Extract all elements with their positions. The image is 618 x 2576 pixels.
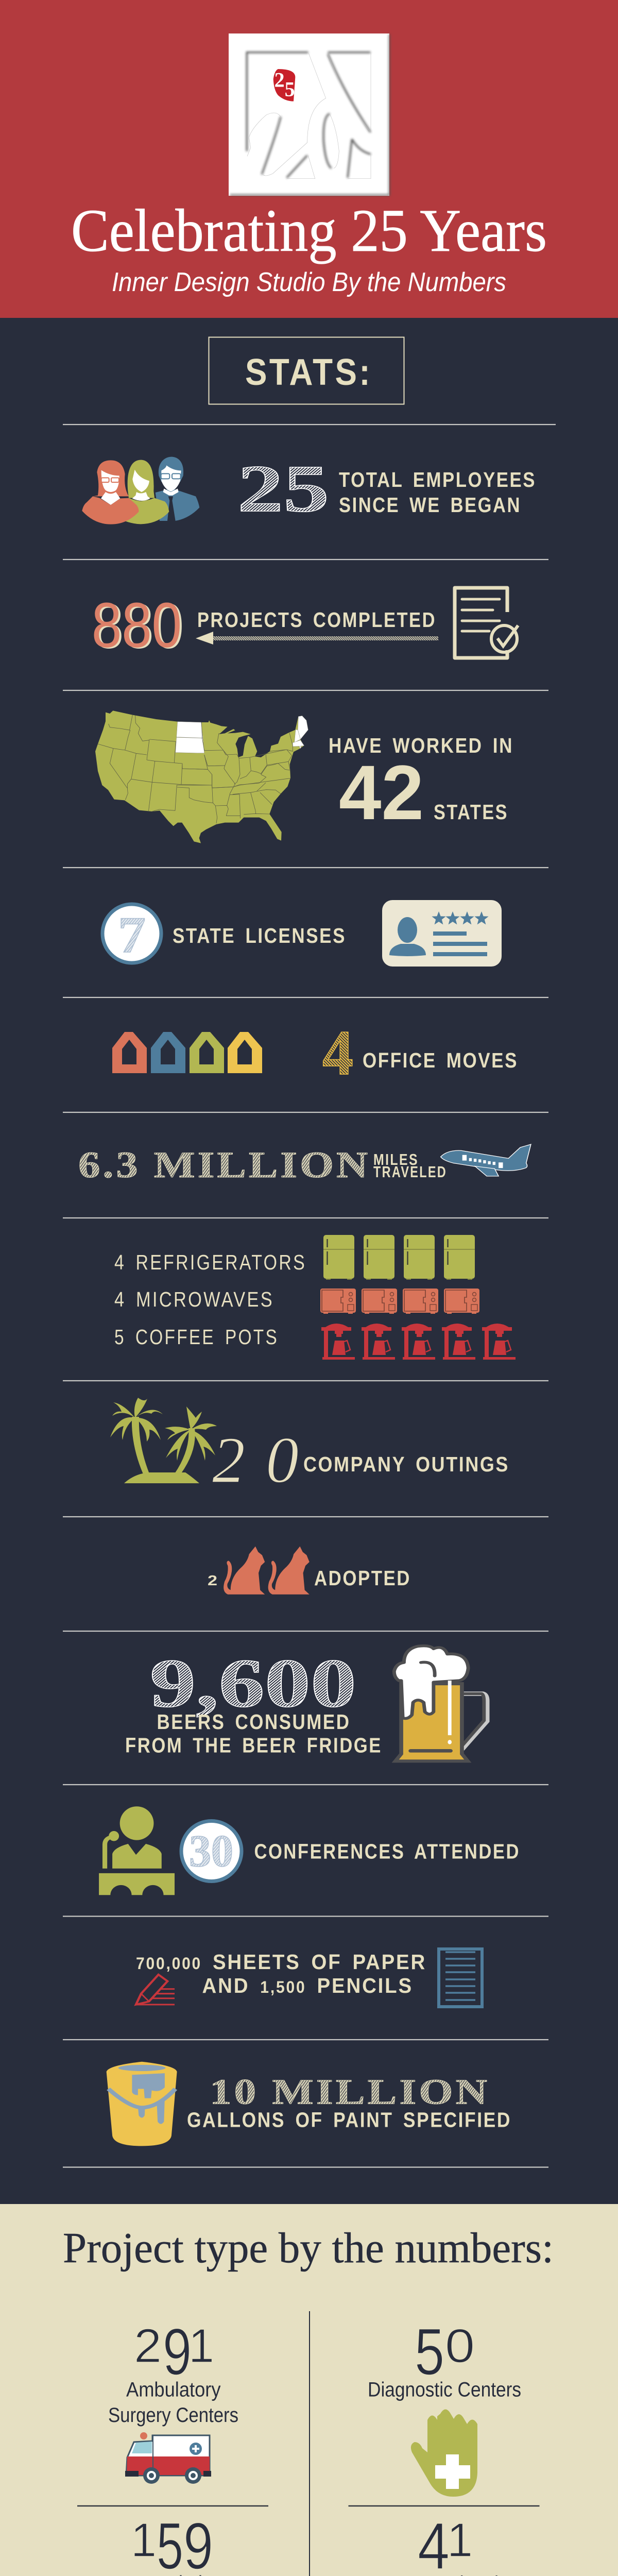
number: 10 million: 10 MILLION [210, 2072, 490, 2112]
panel: ambulatory surgery centers [108, 2315, 238, 2484]
logo: 5 [285, 78, 295, 101]
number: 291: 2 [134, 2319, 162, 2372]
label: sheets of paper: 700,000 SHEETS OF PAPER [136, 1950, 426, 1974]
panel: paper and pencils [136, 1949, 482, 2007]
icons: refrigerators [323, 1235, 475, 1280]
number: 41: 1 [447, 2513, 473, 2567]
label: OFFICE MOVES [363, 1048, 518, 1072]
title: Celebrating 25 Years [71, 197, 547, 264]
label: coffee pots: 5 COFFEE POTS [114, 1325, 279, 1349]
label: refrigerators: 4 REFRIGERATORS [114, 1250, 306, 1274]
icons: coffee pots [321, 1324, 516, 1360]
map: United States [95, 710, 308, 843]
icon: paper sheet [439, 1949, 482, 2007]
number: 291: 1 [188, 2319, 214, 2372]
label: GALLONS OF PAINT SPECIFIED [187, 2108, 511, 2132]
icon: two cats [224, 1546, 310, 1595]
panel: total employees [82, 452, 536, 526]
label: Surgery Centers [108, 2404, 238, 2427]
icon: ambulance [125, 2432, 211, 2484]
panel: miles traveled [78, 1144, 531, 1185]
panel: company outings [110, 1398, 509, 1497]
icon: checked document [455, 588, 518, 658]
panel: hospitals [131, 2510, 213, 2576]
panel: projects completed [92, 588, 518, 661]
logo: 2 [274, 68, 285, 91]
section background: header [0, 0, 618, 318]
number: 50: 0 [445, 2319, 475, 2372]
number: 2: 2 [208, 1572, 217, 1588]
icon: beer mug [394, 1646, 487, 1761]
number: 291: 9 [163, 2315, 192, 2389]
label: STATE LICENSES [173, 924, 346, 947]
icon: hand with cross [411, 2409, 477, 2497]
number: 6.3 million: 6.3 MILLION [78, 1144, 370, 1185]
number: 4: 4 [322, 1018, 353, 1088]
icon: speaker at podium [99, 1806, 175, 1895]
label: HAVE WORKED IN [329, 734, 513, 757]
icons: microwaves [320, 1289, 479, 1314]
panel: beers consumed [125, 1645, 487, 1761]
label: BEERS CONSUMED [157, 1710, 350, 1734]
label: COMPANY OUTINGS [303, 1452, 509, 1476]
number: 880: 880 [92, 590, 182, 661]
icon: airplane [441, 1144, 531, 1176]
icon: palm trees [110, 1398, 217, 1483]
section background: stats [0, 318, 618, 2204]
number: 25: 25 [237, 452, 329, 526]
stats heading box [209, 337, 404, 404]
label: microwaves: 4 MICROWAVES [114, 1287, 274, 1311]
label: total employees: TOTAL EMPLOYEES [339, 468, 536, 492]
number: 50: 5 [415, 2315, 444, 2389]
label: miles: MILES [373, 1150, 419, 1168]
number: 159: 1 [131, 2513, 157, 2567]
icon: three people [82, 457, 199, 524]
label: STATES [434, 800, 508, 824]
badge: 7 [102, 904, 161, 963]
label: traveled: TRAVELED [373, 1163, 447, 1181]
icon: paint bucket [107, 2062, 177, 2146]
badge: 7: 7 [118, 906, 146, 963]
section background: project types [0, 2204, 618, 2576]
label: PROJECTS COMPLETED [197, 608, 436, 632]
label: pencils: AND 1,500 PENCILS [202, 1974, 413, 1997]
panel: occupational medical rehabs [380, 2510, 510, 2576]
heading: project type: Project type by the numbers: [63, 2224, 554, 2272]
badge: 30: 30 [189, 1826, 233, 1876]
label: FROM THE BEER FRIDGE [125, 1733, 382, 1757]
logo [229, 33, 389, 196]
badge: 30 [181, 1821, 242, 1882]
label: Ambulatory [126, 2378, 220, 2401]
icon: four houses [112, 1032, 262, 1073]
panel: states worked in [95, 710, 513, 843]
number: 20 script: 20 [212, 1423, 299, 1497]
label: Diagnostic Centers [368, 2378, 521, 2401]
panel: conferences attended [99, 1806, 520, 1895]
label: ADOPTED [314, 1566, 411, 1590]
icon: license card [382, 900, 502, 967]
panel: diagnostic centers [368, 2315, 521, 2497]
label: CONFERENCES ATTENDED [254, 1839, 520, 1863]
icon: pencil [136, 1975, 175, 2005]
number: 9,600: 9,600 [150, 1645, 356, 1721]
panel: gallons of paint [107, 2062, 511, 2146]
panel: cats adopted [208, 1546, 411, 1595]
stats heading box: STATS: [245, 352, 372, 393]
arrow [196, 632, 438, 645]
panel: state licenses [102, 900, 502, 967]
subtitle: Inner Design Studio By the Numbers [112, 267, 506, 297]
number: 42: 42 [339, 749, 424, 836]
panel: office moves [112, 1018, 518, 1088]
label: since we began: SINCE WE BEGAN [339, 493, 521, 517]
panel: appliances [114, 1235, 516, 1360]
